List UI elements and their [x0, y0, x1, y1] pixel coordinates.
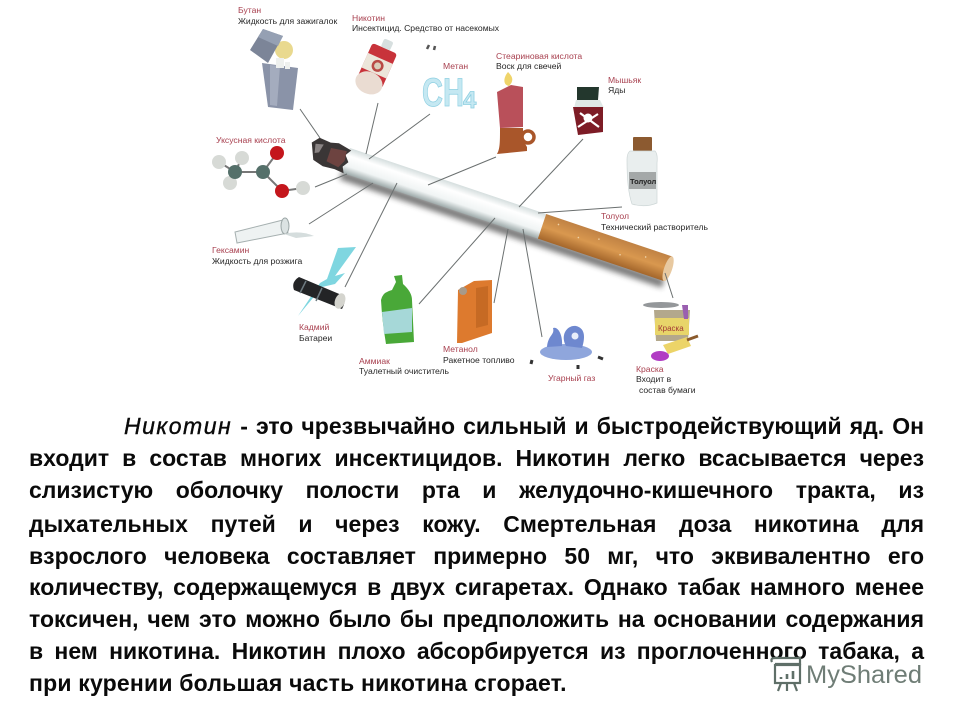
chemical labels: Яды [608, 85, 625, 95]
chemical labels: Метан [443, 61, 468, 71]
chemical labels: Краска [636, 364, 664, 374]
text: в нем никотина. Никотин плохо абсорбируется из проглоченного табака, а [29, 638, 924, 664]
chemical labels: Инсектицид. Средство от насекомых [352, 23, 500, 33]
chemical labels: Уксусная кислота [216, 135, 286, 145]
chemical labels: Кадмий [299, 322, 330, 332]
chemical labels: Гексамин [212, 245, 249, 255]
chemical labels: состав бумаги [639, 385, 696, 395]
chemical labels: Угарный газ [548, 373, 595, 383]
illustration: cigarette composition [212, 5, 708, 395]
chemical labels: Никотин [352, 13, 385, 23]
watermark logo: MyShared [770, 656, 922, 692]
chemical labels: Толуол [601, 211, 629, 221]
chemical labels: Ракетное топливо [443, 355, 515, 365]
bottle label: Толуол [630, 177, 657, 186]
text: дыхательных путей и через кожу. Смертельная доза никотина для [29, 511, 924, 537]
logo wordmark: MyShared [806, 661, 922, 689]
icon: ammonia bottle [381, 275, 414, 344]
icon: methanol jerrycan [457, 280, 492, 343]
chemical labels: Мышьяк [608, 75, 641, 85]
icon: methane formula CH4: CH [422, 71, 464, 115]
connector lines [300, 103, 673, 337]
chemical labels: Стеариновая кислота [496, 51, 582, 61]
text block: nicotine description [29, 413, 924, 696]
text: количеству, содержащемуся в двух сигаретах. Однако табак намного менее [29, 574, 924, 600]
cigarette [303, 135, 676, 289]
chemical labels: Воск для свечей [496, 61, 562, 71]
text: Никотин - это чрезвычайно сильный и быстродействующий яд. Он [124, 413, 924, 439]
chemical labels: Батареи [299, 333, 332, 343]
chemical labels: Входит в [636, 374, 672, 384]
icon: presentation easel [771, 658, 800, 691]
text: при курении большая часть никотина сгорает. [29, 670, 567, 696]
icon: toluene bottle [627, 137, 657, 206]
icon: cadmium battery with lightning [293, 247, 356, 316]
icon: arsenic bottle [573, 87, 604, 135]
icon: lighter [250, 29, 298, 110]
chemical labels: Жидкость для зажигалок [238, 16, 337, 26]
chemical labels: Технический растворитель [601, 222, 708, 232]
icon: candle [497, 72, 534, 154]
icon: hexamine tube [235, 218, 314, 243]
icon: paint can and brush [643, 302, 698, 361]
icon: methane formula CH4: 4 [463, 87, 477, 114]
chemical labels: Метанол [443, 344, 478, 354]
icon: acetic acid molecule [212, 146, 310, 198]
chemical labels [212, 5, 708, 395]
chemical labels: Бутан [238, 5, 261, 15]
can label: Краска [658, 324, 684, 333]
chemical labels: Туалетный очиститель [359, 366, 450, 376]
text: токсичен, чем это можно было бы предположить на основании содержания [29, 606, 924, 632]
icon: insecticide bottle [352, 34, 435, 99]
chemical labels: Аммиак [359, 356, 390, 366]
text: слизистую оболочку полости рта и желудочно-кишечного тракта, из [29, 477, 924, 503]
text: входит в состав многих инсектицидов. Никотин легко всасывается через [29, 445, 924, 471]
text: взрослого человека составляет примерно 50 мг, что эквивалентно его [29, 543, 924, 569]
icon: carbon monoxide burner [531, 326, 603, 369]
chemical labels: Жидкость для розжига [212, 256, 302, 266]
